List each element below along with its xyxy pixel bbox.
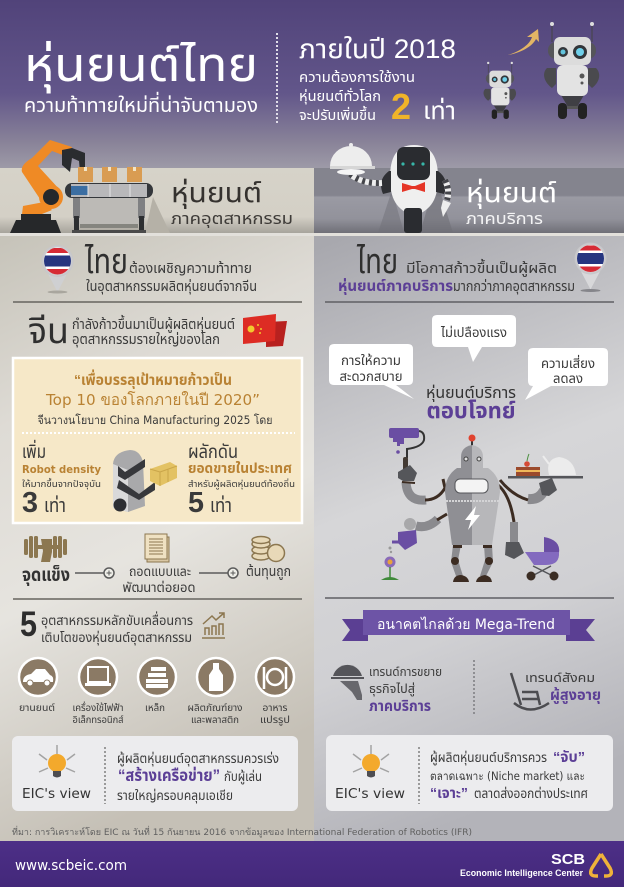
icon: robot carrying boxes [113, 450, 177, 512]
icon: car [19, 658, 57, 696]
text: low cost: ต้นทุนถูก [246, 563, 291, 580]
labels: industries: ยานยนต์ [19, 703, 55, 714]
text: boost domestic sales: เท่า [210, 494, 232, 517]
text: strength: จุดแข็ง [22, 563, 70, 586]
heading: service robot answers: ตอบโจทย์ [426, 398, 516, 423]
text: EIC right: ตลาดส่งออกต่างประเทศ [474, 786, 588, 801]
text: boost domestic sales [188, 442, 295, 519]
headline: within 2018: หุ่นยนต์ทั่วโลก [299, 87, 381, 105]
text: quote [37, 369, 272, 427]
callout: convenience: สะดวกสบาย [340, 369, 402, 384]
text: boost domestic sales: ผลักดัน [188, 442, 238, 463]
icon: SCB logo [591, 854, 611, 876]
ribbon: Mega-Trend: อนาคตไกลด้วย Mega-Trend [377, 616, 555, 633]
text: increase robot density: เพิ่ม [22, 439, 46, 463]
callout: no effort [432, 315, 516, 362]
headline: within 2018: เท่า [423, 97, 456, 125]
callout: convenience: การให้ความ [341, 353, 401, 368]
text: EIC right: “เจาะ” [430, 785, 468, 802]
icon: small robot [484, 62, 516, 119]
text: service trend [369, 665, 442, 715]
heading: service robots: หุ่นยนต์ [466, 177, 557, 209]
callout: convenience [329, 344, 414, 399]
panel: China target box [13, 358, 302, 523]
icon: plate and cutlery [256, 658, 294, 696]
text: five industries [20, 605, 193, 646]
title [24, 38, 258, 117]
headline: within 2018: ความต้องการใช้งาน [299, 69, 415, 85]
icon: laptop [79, 658, 117, 696]
title: หุ่นยนต์ไทย [24, 38, 258, 93]
icon: right arms [498, 478, 557, 559]
text: EIC right: ตลาดเฉพาะ (Niche market) และ [430, 769, 585, 783]
title: ความท้าทายใหม่ที่น่าจับตามอง [24, 91, 258, 117]
labels: industries [19, 701, 290, 726]
icon: China flag [243, 314, 287, 347]
callout: lower risk [525, 348, 608, 400]
icon: bottle [197, 658, 235, 696]
heading: industrial robots: ภาคอุตสาหกรรม [171, 211, 293, 228]
icon: bulb right [353, 745, 389, 778]
callout: lower risk: ลดลง [553, 371, 583, 386]
panel: EIC view left: EIC's view [22, 787, 91, 802]
icon: dumbbell arm [24, 536, 67, 562]
icon: waiter trend [331, 665, 364, 700]
connector: plus 1 [75, 568, 114, 578]
text: aging trend: เทรนด์สังคม [525, 671, 595, 685]
icon: steel stack [138, 658, 176, 696]
footer bar: SCB [551, 851, 585, 868]
heading: service robots [466, 177, 557, 228]
footer bar [0, 841, 624, 887]
text: aging trend: ผู้สูงอายุ [550, 686, 601, 705]
text: five industries: อุตสาหกรรมหลักขับเคลื่อนการ [41, 611, 193, 629]
icon: paint roller [389, 428, 424, 471]
text: quote: จีนวางนโยบาย China Manufacturing 2025 โดย [37, 413, 272, 427]
background: header gradient [0, 0, 624, 169]
text: service trend: ธุรกิจไปสู่ [369, 682, 415, 696]
icon: conveyor with boxes [65, 167, 170, 233]
panel: EIC view right: EIC's view [335, 787, 405, 802]
icon: stroller [525, 537, 559, 580]
text: service trend: เทรนด์การขยาย [369, 665, 442, 679]
text: quote: Top 10 ของโลกภายในปี 2020” [45, 391, 260, 409]
text: service trend: ภาคบริการ [369, 698, 431, 715]
icon: flower [381, 556, 399, 580]
icon: tray with cake and teapot [508, 454, 583, 478]
headline: within 2018: ภายในปี 2018 [299, 34, 456, 64]
icon: cloche [330, 143, 375, 175]
illustration: multitasking robot [381, 428, 583, 582]
text: Thailand opportunity [338, 242, 575, 295]
text: EIC right: “จับ” [553, 749, 585, 766]
text: EIC left: ผู้ผลิตหุ่นยนต์อุตสาหกรรมควรเร่ง [117, 750, 279, 767]
icon: document [145, 534, 169, 562]
heading: service robots: ภาคบริการ [466, 211, 543, 228]
text: EIC left [117, 750, 279, 804]
text: boost domestic sales: ยอดขายในประเทศ [188, 460, 292, 476]
icon: bulb left [39, 745, 75, 778]
icon: robot head [461, 434, 483, 468]
headline: within 2018 [299, 34, 456, 127]
icon: big robot [544, 22, 599, 119]
panel: service band [314, 168, 624, 233]
text: five industries: เติบโตของหุ่นยนต์อุตสาหกรรม [41, 629, 192, 646]
heading: industrial robots [171, 177, 293, 228]
icon: Thai flag pin right [574, 242, 606, 292]
headline: within 2018: 2 [391, 86, 411, 127]
text: increase robot density [22, 439, 101, 519]
text: Thailand faces challenge [84, 242, 257, 295]
icon: Thai flag pin left [42, 245, 74, 294]
text: China rising: จีน [28, 310, 69, 351]
text: Thailand opportunity: มากกว่าภาคอุตสาหกรรม [453, 278, 575, 295]
text: Thailand faces challenge: ในอุตสาหกรรมผลิตหุ่นยนต์จากจีน [86, 278, 257, 295]
icon: industrial robot arm [10, 140, 85, 233]
text: quote: “เพื่อบรรลุเป้าหมายก้าวเป็น [74, 369, 232, 389]
arrow: growth [508, 29, 539, 55]
callout: no effort: ไม่เปลืองแรง [440, 325, 507, 340]
labels: industries: อิเล็กทรอนิกส์ [72, 715, 124, 726]
text: increase robot density: Robot density [22, 463, 101, 476]
band strip [0, 233, 624, 237]
text: EIC right: ผู้ผลิตหุ่นยนต์บริการควร [430, 750, 547, 765]
heading: service robot answers [426, 384, 516, 423]
labels: industries: แปรรูป [260, 715, 290, 726]
text: boost domestic sales: 5 [188, 487, 204, 519]
panel: EIC view right [326, 735, 613, 811]
icon: lower left arm and watering can [388, 514, 447, 553]
footer bar: Economic Intelligence Center [460, 868, 583, 878]
text: increase robot density: เท่า [44, 494, 66, 517]
text: EIC left: “สร้างเครือข่าย” [118, 765, 220, 785]
icon: robot body [445, 468, 500, 545]
icon: waiter robot [350, 145, 453, 233]
text: China rising: อุตสาหกรรมรายใหญ่ของโลก [72, 331, 220, 348]
headline: within 2018: จะปรับเพิ่มขึ้น [299, 105, 376, 123]
text: reverse engineering: ถอดแบบและ [129, 564, 191, 579]
text: EIC left: กับผู้เล่น [224, 768, 262, 785]
heading: service robot answers: หุ่นยนต์บริการ [426, 384, 516, 402]
source note: ที่มา: การวิเคราะห์โดย EIC ณ วันที่ 15 กันยายน 2016 จากข้อมูลของ International Federation of Robotics (IFR) [12, 825, 472, 838]
icon: rocking chair [511, 673, 549, 710]
icon: legs [451, 545, 493, 582]
panel: right column background [314, 236, 624, 841]
text: increase robot density: ให้มากขึ้นจากปัจจุบัน [22, 477, 101, 489]
text: reverse engineering [122, 564, 196, 595]
labels: industries: อาหาร [262, 703, 288, 714]
labels: industries: ผลิตภัณฑ์ยาง [188, 703, 242, 714]
text: reverse engineering: พัฒนาต่อยอด [122, 580, 196, 595]
text: Thailand opportunity: หุ่นยนต์ภาคบริการ [338, 277, 453, 295]
text: increase robot density: 3 [22, 487, 38, 519]
text: boost domestic sales: สำหรับผู้ผลิตหุ่นยนต์ท้องถิ่น [188, 478, 295, 490]
panel: industrial band [0, 168, 314, 233]
text: China rising [28, 310, 235, 351]
text: Thailand faces challenge: ต้องเผชิญความท้าทาย [129, 261, 252, 277]
labels: industries: เหล็ก [145, 703, 165, 714]
heading: industrial robots: หุ่นยนต์ [171, 177, 262, 209]
panel: EIC view left [12, 736, 298, 811]
ribbon: Mega-Trend [342, 610, 595, 641]
text: EIC right [430, 749, 588, 802]
panel: left column background [0, 236, 314, 841]
callout: lower risk: ความเสี่ยง [541, 354, 595, 371]
icon: upper left arm [398, 465, 445, 500]
icon: growth chart [202, 613, 225, 638]
connector: plus 2 [199, 568, 238, 578]
footer bar: www.scbeic.com [15, 858, 127, 874]
text: Thailand faces challenge: ไทย [84, 242, 128, 281]
text: Thailand opportunity: ไทย [356, 242, 398, 281]
text: five industries: 5 [20, 605, 37, 644]
labels: industries: และพลาสติก [191, 715, 239, 726]
header divider [276, 33, 278, 124]
text: Thailand opportunity: มีโอกาสก้าวขึ้นเป็นผู้ผลิต [406, 258, 557, 277]
icon: coins [252, 536, 284, 562]
text: China rising: กำลังก้าวขึ้นมาเป็นผู้ผลิตหุ่นยนต์ [72, 314, 235, 333]
text: EIC left: รายใหญ่ครอบคลุมเอเชีย [117, 787, 233, 804]
labels: industries: เครื่องใช้ไฟฟ้า [72, 701, 124, 714]
text: aging trend [525, 671, 601, 705]
